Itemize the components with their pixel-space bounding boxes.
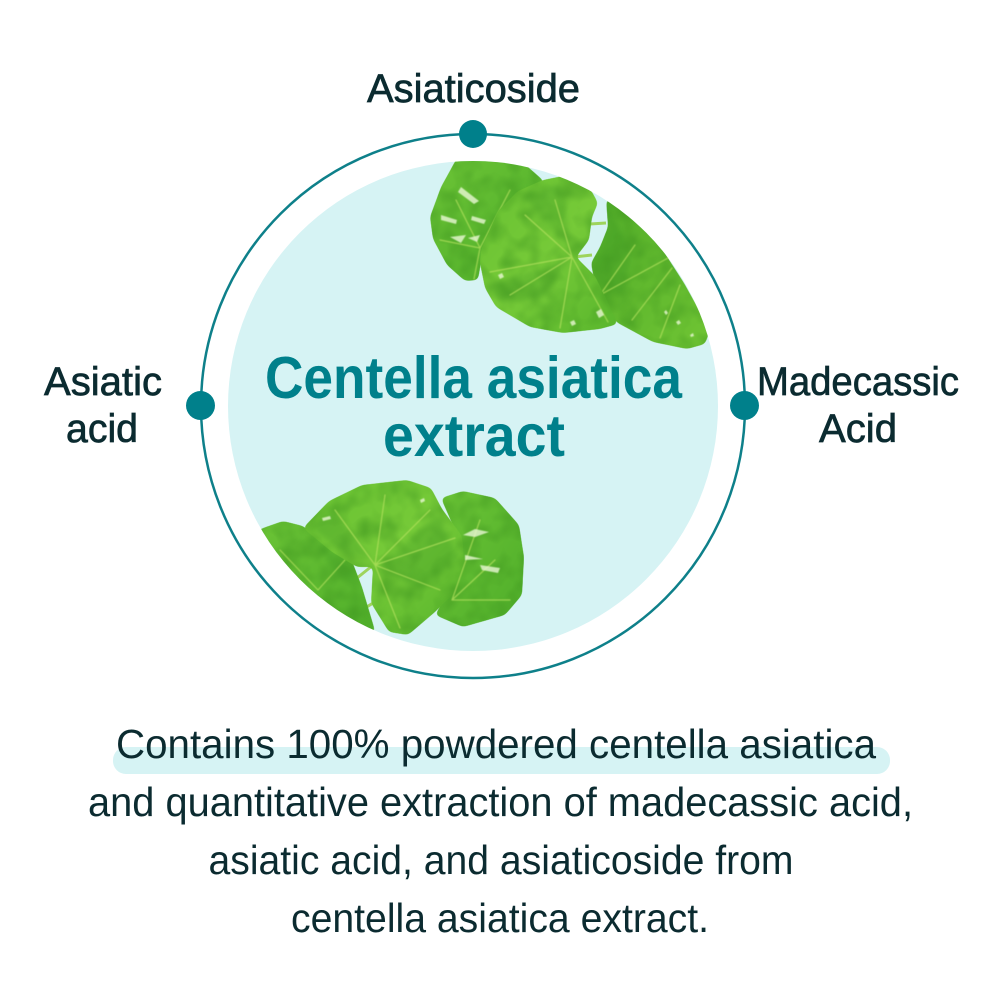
description text: asiatic acid, and asiaticoside from [208, 837, 794, 883]
diagram: centella circle [186, 120, 759, 678]
dot: right [730, 391, 759, 420]
description text: Contains 100% powdered centella asiatica [116, 721, 876, 767]
title: Centella asiatica extract: Centella asiatica [265, 345, 683, 411]
label: Madecassic Acid: Acid [819, 407, 897, 451]
title: Centella asiatica extract: extract [383, 403, 565, 469]
outer ring [201, 134, 745, 678]
highlight bar [113, 747, 890, 774]
leaves: top right [430, 155, 710, 349]
inner pale circle [228, 161, 718, 651]
label: Madecassic Acid: Madecassic [757, 360, 959, 404]
description text [88, 721, 913, 941]
label: Asiatic acid: Asiatic [44, 360, 162, 404]
dot: top [459, 120, 487, 148]
description text: and quantitative extraction of madecassic acid, [88, 779, 913, 825]
label: Asiatic acid [44, 360, 162, 451]
label: Madecassic Acid [757, 360, 959, 451]
leaves: bottom left [250, 480, 524, 635]
description text: centella asiatica extract. [291, 895, 709, 941]
title: Centella asiatica extract [265, 345, 683, 469]
label: Asiaticoside: Asiaticoside [367, 67, 580, 111]
label: Asiatic acid: acid [66, 407, 138, 451]
dot: left [186, 391, 215, 420]
